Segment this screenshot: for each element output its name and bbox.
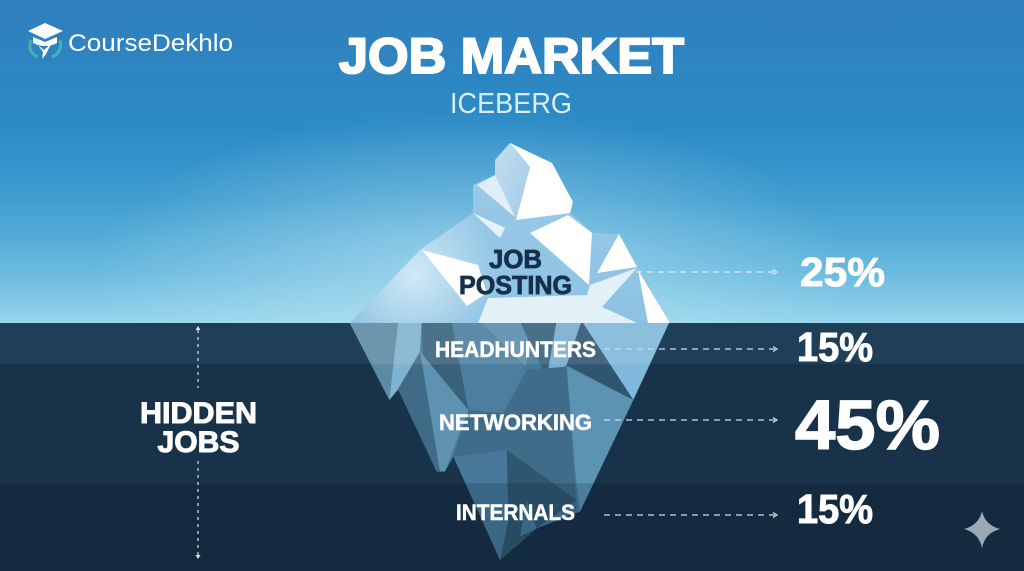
- label: headhunters: HEADHUNTERS: [435, 337, 596, 362]
- arrow: job posting: [636, 270, 777, 274]
- value: 15% internals: 15%: [797, 486, 873, 532]
- sky background: [0, 0, 1024, 323]
- arrow: networking: [604, 418, 777, 422]
- facet: left shoulder: [477, 175, 515, 217]
- label: job posting: [459, 244, 572, 300]
- facet: small ridge: [473, 213, 505, 238]
- value: 25%: 25%: [800, 249, 885, 295]
- value: 45%: 45%: [795, 386, 940, 464]
- arrow: internals: [604, 512, 777, 518]
- label: hidden jobs: [140, 397, 257, 459]
- facet: right edge: [638, 270, 670, 323]
- title: JOB MARKET: [339, 28, 684, 84]
- facet: left white: [422, 250, 487, 306]
- subtitle: ICEBERG: [450, 88, 572, 120]
- label: hidden jobs: JOBS: [158, 426, 240, 459]
- value: 15% headhunters: 15%: [797, 324, 873, 370]
- label: job posting: JOB: [489, 244, 542, 274]
- label: networking: NETWORKING: [439, 410, 592, 435]
- arrow: hidden jobs down: [196, 461, 200, 559]
- arrow: headhunters: [604, 346, 777, 352]
- water layers: [0, 323, 1024, 571]
- iceberg above water: [350, 143, 670, 323]
- facet: right small: [597, 234, 637, 273]
- logo: CourseDekhlo: CourseDekhlo: [68, 30, 233, 57]
- arrow: hidden jobs up: [196, 326, 200, 388]
- iceberg below water: [350, 323, 669, 560]
- icon: graduation cap: [28, 23, 63, 59]
- logo: CourseDekhlo: [28, 23, 233, 59]
- label: hidden jobs: HIDDEN: [140, 397, 257, 430]
- facet: large centre: [530, 215, 592, 285]
- facet: summit: [510, 143, 573, 220]
- facet: lower light: [478, 268, 637, 323]
- icon: sparkle: [964, 511, 1000, 548]
- label: job posting: POSTING: [459, 270, 572, 300]
- label: internals: INTERNALS: [456, 500, 575, 525]
